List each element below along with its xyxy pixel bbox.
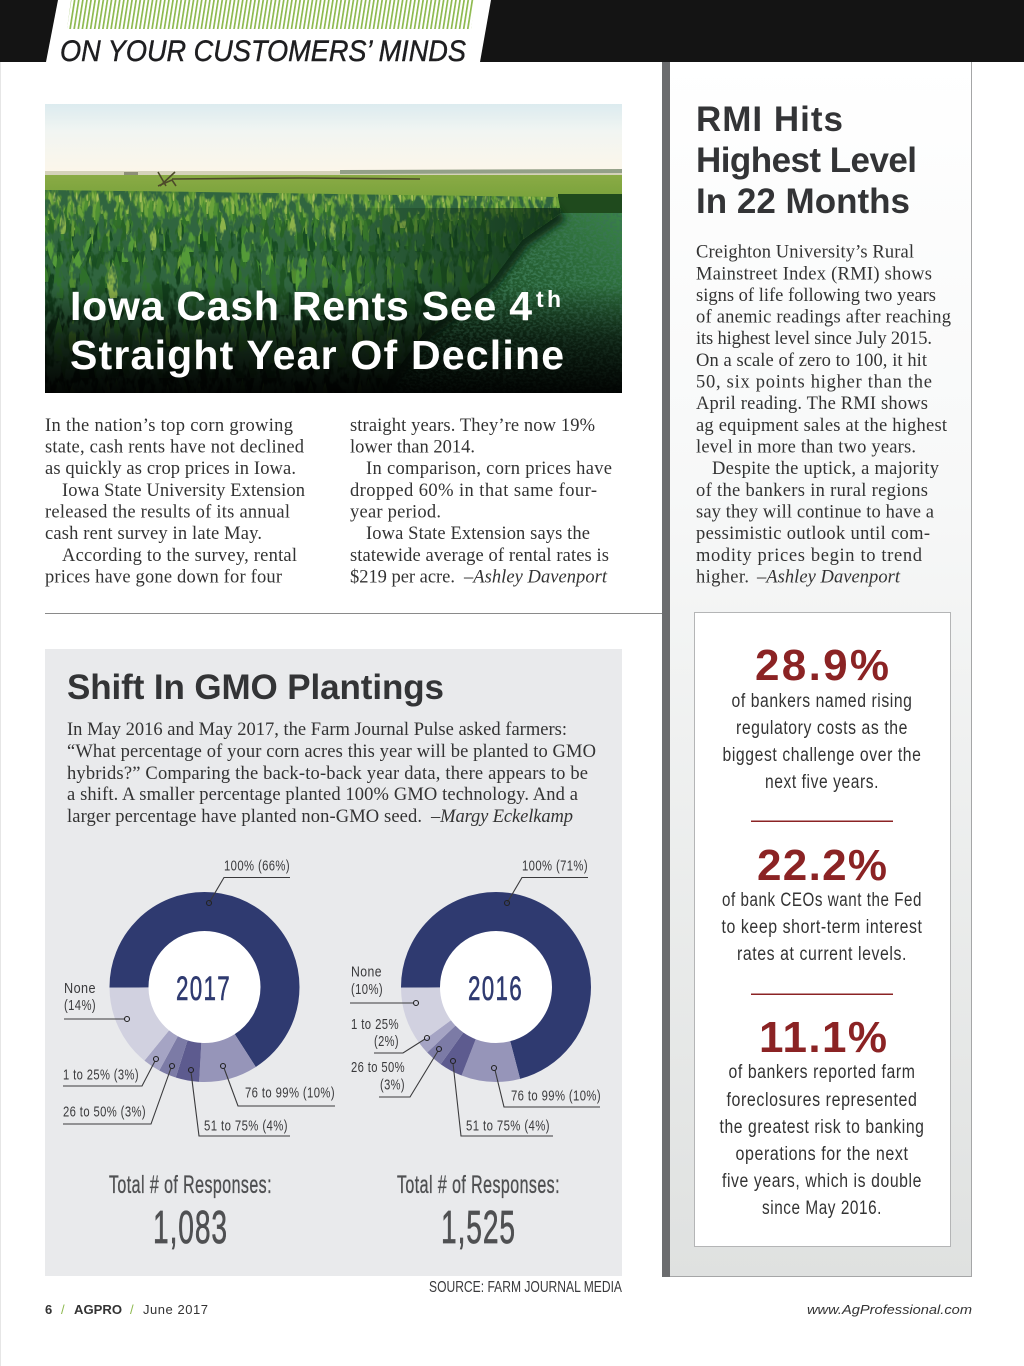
article: right column: statewide average of rental rates is bbox=[350, 546, 609, 566]
stat: 22.2%: 22.2% bbox=[757, 841, 887, 890]
segment: 26 to 50% bbox=[420, 912, 572, 1062]
stat: 28.9%: biggest challenge over the bbox=[722, 745, 922, 766]
panel: RMI sidebar bbox=[662, 62, 972, 1277]
callout: 1 to 25% (3%) bbox=[63, 1056, 158, 1086]
callout: 76 to 99% (10%): 76 to 99% (10%) bbox=[245, 1086, 335, 1102]
stat: 28.9%: 28.9% bbox=[755, 641, 889, 690]
callout: 76 to 99% (10%) bbox=[492, 1066, 601, 1107]
article: right column: year period. bbox=[350, 502, 441, 522]
article: left column: released the results of its annual bbox=[45, 502, 290, 522]
callout: 100% (71%): 100% (71%) bbox=[522, 858, 588, 874]
footer website: www.AgProfessional.com bbox=[807, 1302, 972, 1317]
sidebar dark strip bbox=[662, 62, 670, 1277]
photo headline: Straight Year Of Decline bbox=[70, 332, 564, 378]
photo headline: Iowa Cash Rents See 4 bbox=[70, 283, 532, 329]
totals 2016: Total # of Responses: bbox=[397, 1171, 560, 1199]
green stripes bbox=[67, 0, 475, 29]
article: left column: In the nation’s top corn growing bbox=[45, 416, 293, 436]
footer folio: / bbox=[130, 1302, 134, 1317]
callout: 1 to 25% (2%) bbox=[351, 1017, 430, 1053]
year label: 2016 bbox=[468, 970, 523, 1008]
horizon tree line bbox=[340, 169, 622, 174]
sidebar outline bbox=[670, 62, 972, 1276]
callout: None (14%) bbox=[64, 981, 130, 1022]
sidebar article: On a scale of zero to 100, it hit bbox=[696, 351, 928, 371]
callout: None (14%): None bbox=[64, 981, 96, 997]
segment: 1 to 25% bbox=[129, 912, 280, 1062]
article: left column: as quickly as crop prices in Iowa. bbox=[45, 459, 296, 479]
article: right column: lower than 2014. bbox=[350, 438, 475, 458]
callout: 26 to 50% (3%) bbox=[63, 1064, 174, 1124]
sidebar article: April reading. The RMI shows bbox=[696, 394, 928, 414]
panel intro text: In May 2016 and May 2017, the Farm Journal Pulse asked farmers: bbox=[67, 720, 567, 740]
sidebar article: 50, six points higher than the bbox=[696, 373, 932, 393]
callout: 100% (71%) bbox=[504, 858, 588, 906]
totals 2017 bbox=[109, 1171, 272, 1253]
totals 2016 bbox=[397, 1171, 560, 1253]
grass texture bbox=[406, 213, 622, 382]
segment: 51 to 75% bbox=[129, 912, 280, 1062]
header band bbox=[0, 0, 1024, 68]
callout: 26 to 50% (3%) bbox=[351, 1046, 442, 1097]
second corn tips bbox=[45, 199, 565, 251]
panel intro text: –Margy Eckelkamp bbox=[430, 807, 573, 827]
source note: SOURCE: FARM JOURNAL MEDIA bbox=[429, 1279, 622, 1296]
article: right column: $219 per acre. bbox=[350, 568, 455, 588]
callout: 26 to 50% (3%): 26 to 50% bbox=[351, 1060, 405, 1076]
footer folio: AGPRO bbox=[74, 1302, 122, 1317]
callout: 100% (66%): 100% (66%) bbox=[224, 858, 290, 874]
sidebar article: its highest level since July 2015. bbox=[696, 329, 932, 349]
corn mottling bbox=[45, 190, 561, 382]
stat: 28.9% bbox=[722, 641, 922, 793]
separator bbox=[751, 994, 893, 995]
photo panel: corn field bbox=[45, 104, 622, 395]
donut chart 2016 bbox=[420, 912, 572, 1062]
photo headline bbox=[70, 283, 564, 378]
footer folio: June 2017 bbox=[143, 1302, 208, 1317]
stat: 11.1%: five years, which is double bbox=[722, 1171, 922, 1192]
stat: 28.9%: of bankers named rising bbox=[732, 691, 912, 712]
sidebar article: ag equipment sales at the highest bbox=[696, 416, 948, 436]
stat: 11.1% bbox=[720, 1013, 924, 1219]
article: left column: According to the survey, rental bbox=[62, 546, 297, 566]
totals 2016: 1,525 bbox=[441, 1201, 516, 1253]
segment: 1 to 25% bbox=[420, 912, 572, 1062]
callout: 1 to 25% (2%): (2%) bbox=[374, 1034, 399, 1050]
sidebar article: –Ashley Davenport bbox=[756, 568, 901, 588]
article: right column bbox=[350, 416, 612, 588]
callout: 1 to 25% (2%): 1 to 25% bbox=[351, 1017, 399, 1033]
article: right column: dropped 60% in that same four- bbox=[350, 481, 597, 501]
stat: 22.2%: to keep short-term interest bbox=[722, 917, 923, 938]
segment: 26 to 50% bbox=[129, 912, 280, 1062]
stat: 11.1%: 11.1% bbox=[759, 1013, 887, 1062]
article: right column: straight years. They’re now 19% bbox=[350, 416, 595, 436]
callout: 51 to 75% (4%): 51 to 75% (4%) bbox=[466, 1118, 550, 1134]
stat: 11.1%: since May 2016. bbox=[762, 1198, 882, 1219]
white centre bbox=[148, 930, 262, 1044]
sidebar article: higher. bbox=[696, 568, 749, 588]
section title: ON YOUR CUSTOMERS’ MINDS bbox=[60, 35, 466, 68]
stat: 11.1%: of bankers reported farm bbox=[728, 1062, 916, 1083]
callout: 26 to 50% (3%): (3%) bbox=[380, 1078, 405, 1094]
article: right column: –Ashley Davenport bbox=[463, 568, 608, 588]
article: left column: prices have gone down for four bbox=[45, 568, 282, 588]
irrigation rig bbox=[158, 172, 420, 186]
sidebar article: of the bankers in rural regions bbox=[696, 481, 928, 501]
stat: 22.2%: rates at current levels. bbox=[737, 944, 907, 965]
far corn tips bbox=[45, 190, 565, 220]
panel intro text: a shift. A smaller percentage planted 100% GMO technology. And a bbox=[67, 785, 578, 805]
article: left column: cash rent survey in late May. bbox=[45, 524, 262, 544]
stat: 11.1%: the greatest risk to banking bbox=[720, 1117, 924, 1138]
corn base bbox=[45, 187, 565, 393]
corn right darkening bbox=[352, 208, 561, 340]
callout: 51 to 75% (4%) bbox=[188, 1068, 290, 1136]
sidebar article: Mainstreet Index (RMI) shows bbox=[696, 264, 932, 284]
bright foreground leaves bbox=[47, 226, 372, 298]
sidebar heading bbox=[696, 100, 917, 221]
callout: 1 to 25% (3%): 1 to 25% (3%) bbox=[63, 1068, 139, 1084]
year label: 2017 bbox=[176, 970, 231, 1008]
bottom shade bbox=[45, 285, 622, 393]
sidebar article: Creighton University’s Rural bbox=[696, 243, 914, 263]
stat box bbox=[694, 612, 950, 1246]
segment: 76 to 99% bbox=[129, 912, 280, 1062]
sidebar heading: Highest Level bbox=[696, 141, 917, 180]
distant trees bbox=[124, 172, 138, 175]
segment: None bbox=[420, 912, 572, 1062]
sidebar article: signs of life following two years bbox=[696, 286, 936, 306]
sidebar article: modity prices begin to trend bbox=[696, 546, 923, 566]
segment: 100% bbox=[420, 912, 572, 1062]
callout: 76 to 99% (10%) bbox=[220, 1064, 335, 1106]
separator bbox=[751, 820, 893, 822]
callout: 51 to 75% (4%) bbox=[450, 1058, 553, 1136]
pale foreground leaves bbox=[59, 208, 406, 298]
sidebar heading: RMI Hits bbox=[696, 100, 843, 139]
sidebar background bbox=[670, 62, 972, 1276]
grass shading bbox=[432, 213, 592, 345]
segment: 51 to 75% bbox=[420, 912, 572, 1062]
black bar bbox=[0, 0, 1024, 62]
article: left column: state, cash rents have not declined bbox=[45, 438, 305, 458]
panel background bbox=[45, 649, 622, 1276]
totals 2017: 1,083 bbox=[153, 1201, 228, 1253]
segment: 100% bbox=[129, 912, 280, 1062]
stat: 22.2%: of bank CEOs want the Fed bbox=[722, 890, 922, 911]
panel heading: Shift In GMO Plantings bbox=[67, 668, 444, 707]
panel intro text: “What percentage of your corn acres this year will be planted to GMO bbox=[67, 742, 596, 762]
donut chart 2017 bbox=[129, 912, 280, 1062]
segment: 76 to 99% bbox=[420, 912, 572, 1062]
near corn leaves bbox=[48, 252, 499, 389]
page edge bbox=[0, 62, 1, 1366]
sidebar heading: In 22 Months bbox=[696, 182, 910, 221]
sidebar article: say they will continue to have a bbox=[696, 502, 934, 522]
2017 callouts bbox=[63, 858, 335, 1136]
panel intro text: hybrids?” Comparing the back-to-back year data, there appears to be bbox=[67, 764, 588, 784]
sidebar article bbox=[696, 243, 951, 588]
footer folio bbox=[45, 1302, 208, 1317]
callout: None (10%): (10%) bbox=[351, 982, 383, 998]
stat: 11.1%: operations for the next bbox=[736, 1144, 909, 1165]
divider bbox=[45, 613, 662, 614]
sidebar article: Despite the uptick, a majority bbox=[712, 459, 940, 479]
callout: 26 to 50% (3%): 26 to 50% (3%) bbox=[63, 1104, 146, 1120]
callout: 100% (66%) bbox=[206, 858, 290, 906]
panel intro text bbox=[67, 720, 596, 827]
sidebar article: of anemic readings after reaching bbox=[696, 308, 951, 328]
sky bbox=[45, 104, 622, 172]
footer folio: 6 bbox=[45, 1302, 52, 1317]
segment: None bbox=[129, 912, 280, 1062]
panel intro text: larger percentage have planted non-GMO seed. bbox=[67, 807, 422, 827]
footer folio: / bbox=[61, 1302, 65, 1317]
white tab bbox=[46, 0, 491, 62]
middle corn leaves bbox=[45, 216, 565, 288]
article: left column: Iowa State University Extension bbox=[62, 481, 305, 501]
back corn strip bbox=[558, 194, 622, 214]
corn edge shadow bbox=[380, 213, 561, 393]
horizon haze bbox=[45, 171, 622, 175]
corn block bbox=[45, 190, 561, 393]
white centre bbox=[439, 930, 553, 1044]
callout: 76 to 99% (10%): 76 to 99% (10%) bbox=[511, 1088, 601, 1104]
grass bbox=[404, 213, 622, 393]
panel: GMO plantings bbox=[45, 649, 622, 1276]
callout: None (14%): (14%) bbox=[64, 998, 96, 1014]
photo headline: th bbox=[536, 286, 561, 312]
callout: 51 to 75% (4%): 51 to 75% (4%) bbox=[204, 1118, 288, 1134]
callout: None (10%) bbox=[350, 964, 418, 1006]
distant field bbox=[45, 175, 622, 197]
sidebar article: level in more than two years. bbox=[696, 438, 916, 458]
sidebar article: pessimistic outlook until com- bbox=[696, 524, 930, 544]
stat: 11.1%: foreclosures represented bbox=[726, 1090, 918, 1111]
article: right column: Iowa State Extension says the bbox=[366, 524, 590, 544]
stat: 22.2% bbox=[722, 841, 923, 965]
2016 callouts bbox=[350, 858, 601, 1136]
stat: 28.9%: next five years. bbox=[765, 772, 879, 793]
article: right column: In comparison, corn prices have bbox=[366, 459, 612, 479]
totals 2017: Total # of Responses: bbox=[109, 1171, 272, 1199]
article: left column bbox=[45, 416, 305, 588]
callout: None (10%): None bbox=[351, 964, 382, 980]
stat: 28.9%: regulatory costs as the bbox=[736, 718, 908, 739]
